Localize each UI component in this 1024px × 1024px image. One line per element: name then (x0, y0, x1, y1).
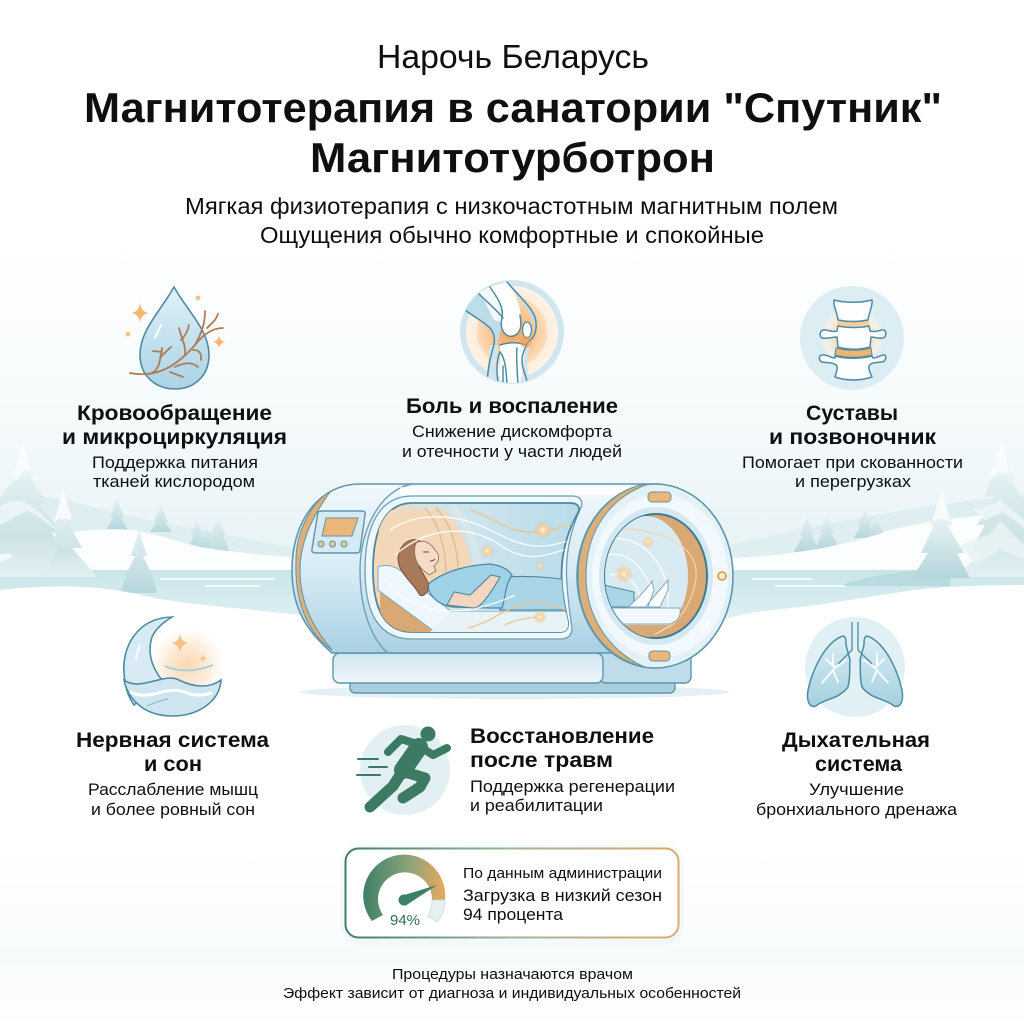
panel: circulation: и микроциркуляция (62, 426, 287, 449)
gauge chart: 94% (390, 912, 420, 929)
right base (600, 650, 691, 683)
panel: joints and spine (742, 286, 963, 491)
title block (84, 38, 942, 248)
panel: nervous system and sleep: и более ровный сон (91, 801, 255, 819)
panel: joints and spine: и перегрузках (795, 473, 912, 491)
panel: recovery after injury: после травм (470, 749, 613, 772)
main title line 2: Магнитотурботрон (310, 134, 715, 181)
shadow (300, 685, 730, 699)
snow foreground (0, 585, 1024, 1024)
door ring (577, 484, 733, 668)
source note: По данным администрации (463, 865, 662, 882)
description: Поддержка питания (92, 454, 258, 472)
illustration: magnetoturbotron capsule (292, 484, 733, 699)
panel: nervous system and sleep: и сон (144, 753, 202, 776)
panel: nervous system and sleep (76, 617, 269, 819)
main base (333, 653, 603, 683)
torso (427, 564, 512, 608)
panel: joints and spine: и позвоночник (769, 426, 937, 449)
heading: Суставы (806, 402, 898, 425)
hair (398, 540, 428, 596)
occupancy text: Загрузка в низкий сезон (463, 886, 662, 905)
icon: moon and waves (124, 617, 224, 716)
panel: respiratory system: бронхиального дренажа (756, 801, 958, 819)
callout: occupancy card: 94 процента (463, 905, 564, 924)
tree left (0, 443, 97, 577)
subtitle line 2: Ощущения обычно комфортные и спокойные (260, 222, 764, 248)
main title line 1: Магнитотерапия в санатории "Спутник" (84, 84, 942, 131)
panel: pain and inflammation (402, 280, 622, 461)
description: Помогает при скованности (742, 454, 963, 472)
heading: Нервная система (76, 729, 269, 752)
panel: respiratory system (756, 617, 958, 819)
description: Улучшение (809, 781, 904, 799)
panel: respiratory system: система (815, 753, 902, 776)
arm (447, 575, 500, 608)
callout: occupancy card (340, 845, 684, 945)
heading: Восстановление (470, 725, 654, 748)
footer note: Эффект зависит от диагноза и индивидуальных особенностей (283, 986, 741, 1002)
mattress (378, 565, 570, 632)
capsule body (292, 484, 660, 653)
panel: circulation: тканей кислородом (93, 473, 255, 491)
heading: Дыхательная (782, 729, 930, 752)
icon: lungs (805, 617, 905, 717)
footer note (283, 967, 741, 1002)
panel: recovery after injury: и реабилитации (470, 797, 603, 815)
heading: Боль и воспаление (406, 395, 618, 418)
panel: circulation (62, 287, 287, 491)
icon: spine (800, 286, 904, 390)
heading: Кровообращение (77, 402, 272, 425)
description: Поддержка регенерации (470, 778, 675, 796)
description: Снижение дискомфорта (412, 423, 613, 441)
icon: knee joint (460, 280, 564, 385)
panel: pain and inflammation: и отечности у части людей (402, 443, 622, 461)
footer note: Процедуры назначаются врачом (392, 967, 633, 983)
panel: recovery after injury (357, 725, 675, 815)
legs (499, 576, 566, 611)
description: Расслабление мышц (88, 781, 259, 799)
lower base (350, 680, 675, 693)
face (414, 541, 439, 575)
control panel (312, 511, 365, 553)
gauge chart (363, 855, 445, 929)
location heading: Нарочь Беларусь (377, 38, 649, 75)
icon: runner (357, 725, 450, 815)
icon: water drop with vessels (126, 287, 225, 389)
subtitle line 1: Мягкая физиотерапия с низкочастотным магнитным полем (185, 193, 838, 219)
waves (385, 517, 582, 611)
window (365, 496, 585, 639)
tree right (955, 443, 1024, 577)
